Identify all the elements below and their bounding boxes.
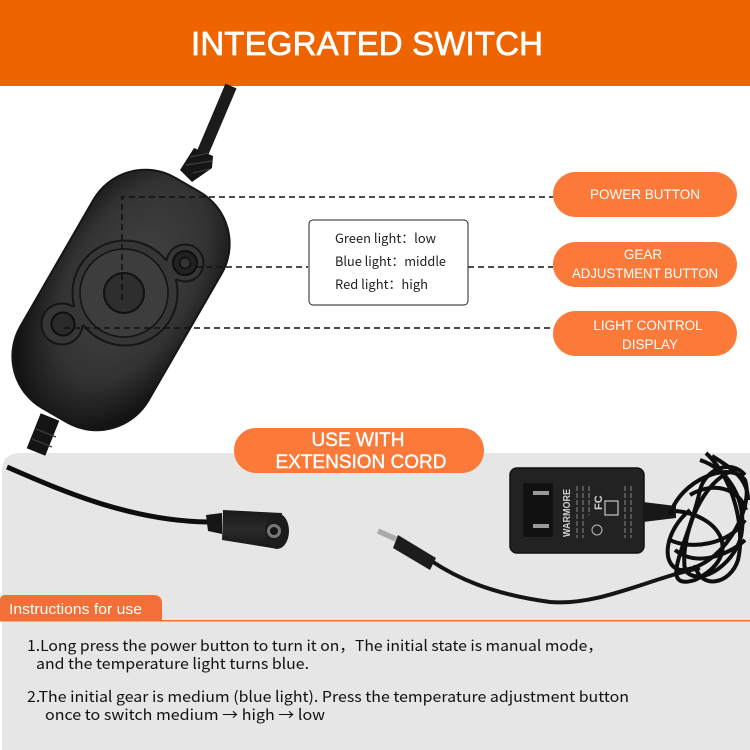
label: use with extension cord: EXTENSION CORD <box>275 452 447 473</box>
instruction step 2: 2.The initial gear is medium (blue light). Press the temperature adjustment button <box>27 686 629 707</box>
adapter brand and marks <box>562 489 605 537</box>
switch upper cable <box>180 86 231 182</box>
instructions heading tab: Instructions for use <box>9 601 142 618</box>
label: power button: POWER BUTTON <box>590 187 700 202</box>
instructions heading tab <box>0 595 750 622</box>
label: use with extension cord <box>234 428 484 473</box>
integrated switch body <box>0 148 252 452</box>
instruction step 2 <box>27 686 629 725</box>
light control display <box>52 312 74 336</box>
strain relief <box>643 502 676 522</box>
label: use with extension cord: USE WITH <box>312 430 404 451</box>
instruction step 2: once to switch medium → high → low <box>45 704 325 725</box>
label: gear adjustment button: ADJUSTMENT BUTTON <box>572 266 718 281</box>
instruction step 1 <box>27 635 603 674</box>
instruction step 1: 1.Long press the power button to turn it on，The initial state is manual mode， <box>27 635 603 656</box>
power button <box>104 273 144 313</box>
label: gear adjustment button: GEAR <box>624 247 662 262</box>
light colour legend box: Blue light：middle <box>335 251 446 270</box>
title: INTEGRATED SWITCH <box>191 25 543 62</box>
label: light control display <box>553 311 737 356</box>
label: light control display: DISPLAY <box>622 337 678 352</box>
switch button outline <box>41 240 204 346</box>
dc plug cord <box>430 560 700 602</box>
instruction step 1: and the temperature light turns blue. <box>36 653 309 674</box>
plug recess and prongs <box>523 483 553 537</box>
label: light control display: LIGHT CONTROL <box>593 318 703 333</box>
header banner <box>0 0 750 86</box>
dc plug <box>378 531 436 570</box>
extension cord with female connector <box>7 467 289 549</box>
gear adjustment button <box>173 251 197 275</box>
adapter body <box>510 468 644 553</box>
adapter brand and marks: WARMORE <box>562 489 573 537</box>
label: gear adjustment button <box>553 242 737 287</box>
panel: extension cord and instructions background <box>2 453 750 750</box>
switch lower cable <box>32 417 56 452</box>
adapter brand and marks: FC <box>593 495 605 510</box>
light colour legend box <box>309 220 468 305</box>
power adapter with cord <box>378 453 748 602</box>
light colour legend box: Red light：high <box>335 274 428 293</box>
center dial <box>80 249 168 337</box>
light colour legend box: Green light：low <box>335 228 437 247</box>
coiled cord <box>668 453 748 582</box>
label: power button <box>553 172 737 217</box>
dashed leader lines <box>64 197 553 328</box>
